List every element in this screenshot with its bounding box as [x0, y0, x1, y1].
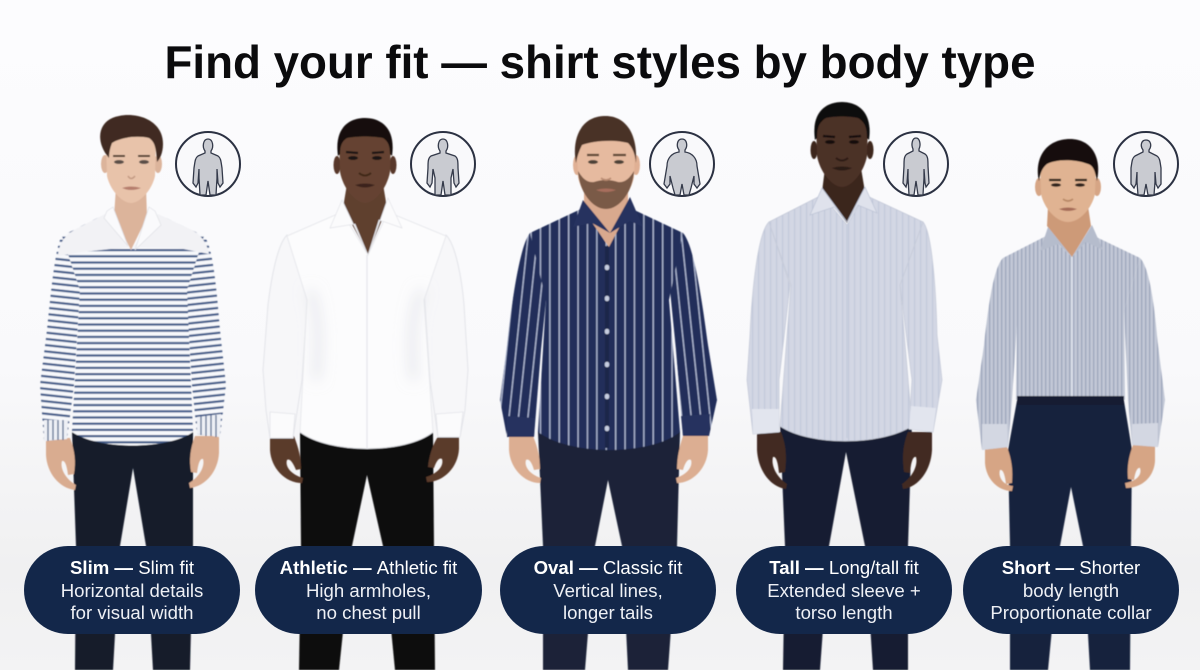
trousers: [538, 432, 680, 670]
caption: athletic: [255, 546, 482, 634]
trousers: [72, 430, 193, 670]
caption: slim: Horizontal details: [61, 580, 203, 601]
body icon: oval: [650, 132, 714, 196]
caption: slim: [24, 546, 240, 634]
shirt: [40, 214, 226, 446]
trousers: [1008, 395, 1132, 670]
head: [573, 116, 643, 247]
shirt: [747, 195, 942, 441]
caption: oval: Vertical lines,: [553, 580, 663, 601]
head: [810, 102, 877, 223]
head: [1035, 139, 1103, 257]
caption: athletic: High armholes,: [306, 580, 431, 601]
figure: athletic: [263, 118, 468, 670]
body icon: athletic: [411, 132, 475, 196]
body icon: slim: [176, 132, 240, 196]
caption: slim: for visual width: [71, 602, 193, 623]
figure: tall: [747, 102, 942, 670]
body icon: tall: [884, 132, 948, 196]
hands: [46, 436, 219, 490]
shirt: [976, 235, 1165, 450]
title: Find your fit — shirt styles by body type: [164, 36, 1036, 88]
body icon: short: [1114, 132, 1178, 196]
trousers: [780, 424, 912, 670]
caption: short: body length: [1023, 580, 1119, 601]
caption: tall: Tall — Long/tall fit: [769, 557, 920, 578]
caption: short: [963, 546, 1179, 634]
figure: short: [976, 139, 1165, 670]
hands: [509, 436, 708, 483]
caption: athletic: no chest pull: [316, 602, 421, 623]
caption: oval: Oval — Classic fit: [534, 557, 683, 578]
shirt: [263, 212, 468, 448]
caption: short: Proportionate collar: [990, 602, 1152, 623]
trousers: [299, 432, 435, 670]
caption: tall: [736, 546, 952, 634]
caption: slim: Slim — Slim fit: [70, 557, 195, 578]
caption: tall: Extended sleeve +: [767, 580, 921, 601]
caption: oval: [500, 546, 716, 634]
caption: oval: longer tails: [563, 602, 653, 623]
caption: short: Short — Shorter: [1002, 557, 1140, 578]
caption: athletic: Athletic — Athletic fit: [280, 557, 458, 578]
hands: [270, 435, 459, 483]
caption: tall: torso length: [795, 602, 893, 623]
hands: [985, 445, 1155, 491]
head: [330, 118, 402, 255]
figure: oval: [500, 116, 717, 670]
figure: slim: [40, 115, 226, 670]
hands: [757, 432, 932, 489]
head: [100, 115, 163, 250]
shirt: [500, 208, 717, 450]
